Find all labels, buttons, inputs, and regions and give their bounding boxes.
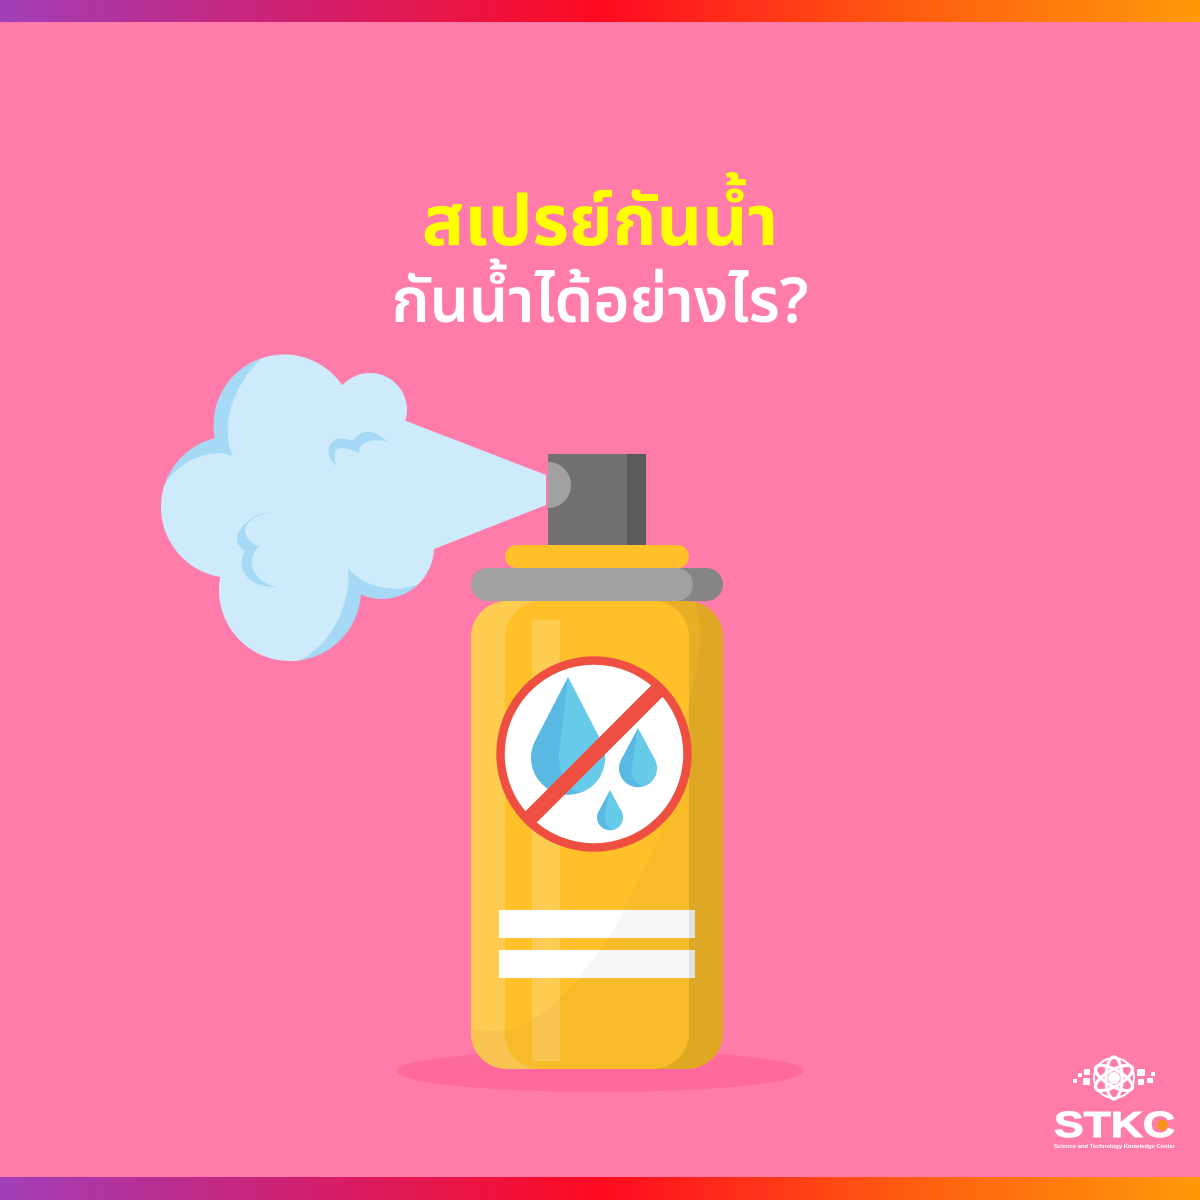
top gradient bar	[0, 0, 1200, 22]
subtitle: กันน้ำได้อย่างไร?	[391, 256, 809, 350]
title: สเปรย์กันน้ำ	[422, 170, 778, 277]
yellow collar	[505, 545, 689, 568]
logo tagline: Science and Technology Knowledge Center	[1054, 1144, 1176, 1150]
large drop	[531, 677, 605, 795]
spray cloud	[161, 354, 546, 661]
nozzle opening	[548, 462, 571, 508]
prohibition slash	[528, 688, 660, 820]
logo side dots	[1073, 1069, 1155, 1085]
gray collar	[471, 568, 723, 601]
logo atom icon	[1092, 1057, 1136, 1099]
label line 2	[499, 950, 695, 978]
bottle right shading	[653, 601, 723, 1069]
label line 1	[499, 910, 695, 938]
ground shadow	[396, 1050, 804, 1092]
spray nozzle	[548, 454, 646, 545]
cloud detail: upper puff	[329, 432, 390, 466]
medium drop	[619, 728, 657, 787]
STKC logo	[1054, 1057, 1176, 1150]
bottle body	[471, 601, 723, 1069]
cloud detail: lower puff	[237, 512, 278, 587]
bottle lower shading	[471, 601, 723, 1069]
no-water sign	[500, 660, 688, 848]
logo wordmark: STKC	[1054, 1104, 1175, 1145]
bottom gradient bar	[0, 1177, 1200, 1200]
bottle highlight stripe	[532, 620, 560, 1061]
logo orange dot	[1157, 1120, 1168, 1130]
small drop	[597, 790, 623, 830]
